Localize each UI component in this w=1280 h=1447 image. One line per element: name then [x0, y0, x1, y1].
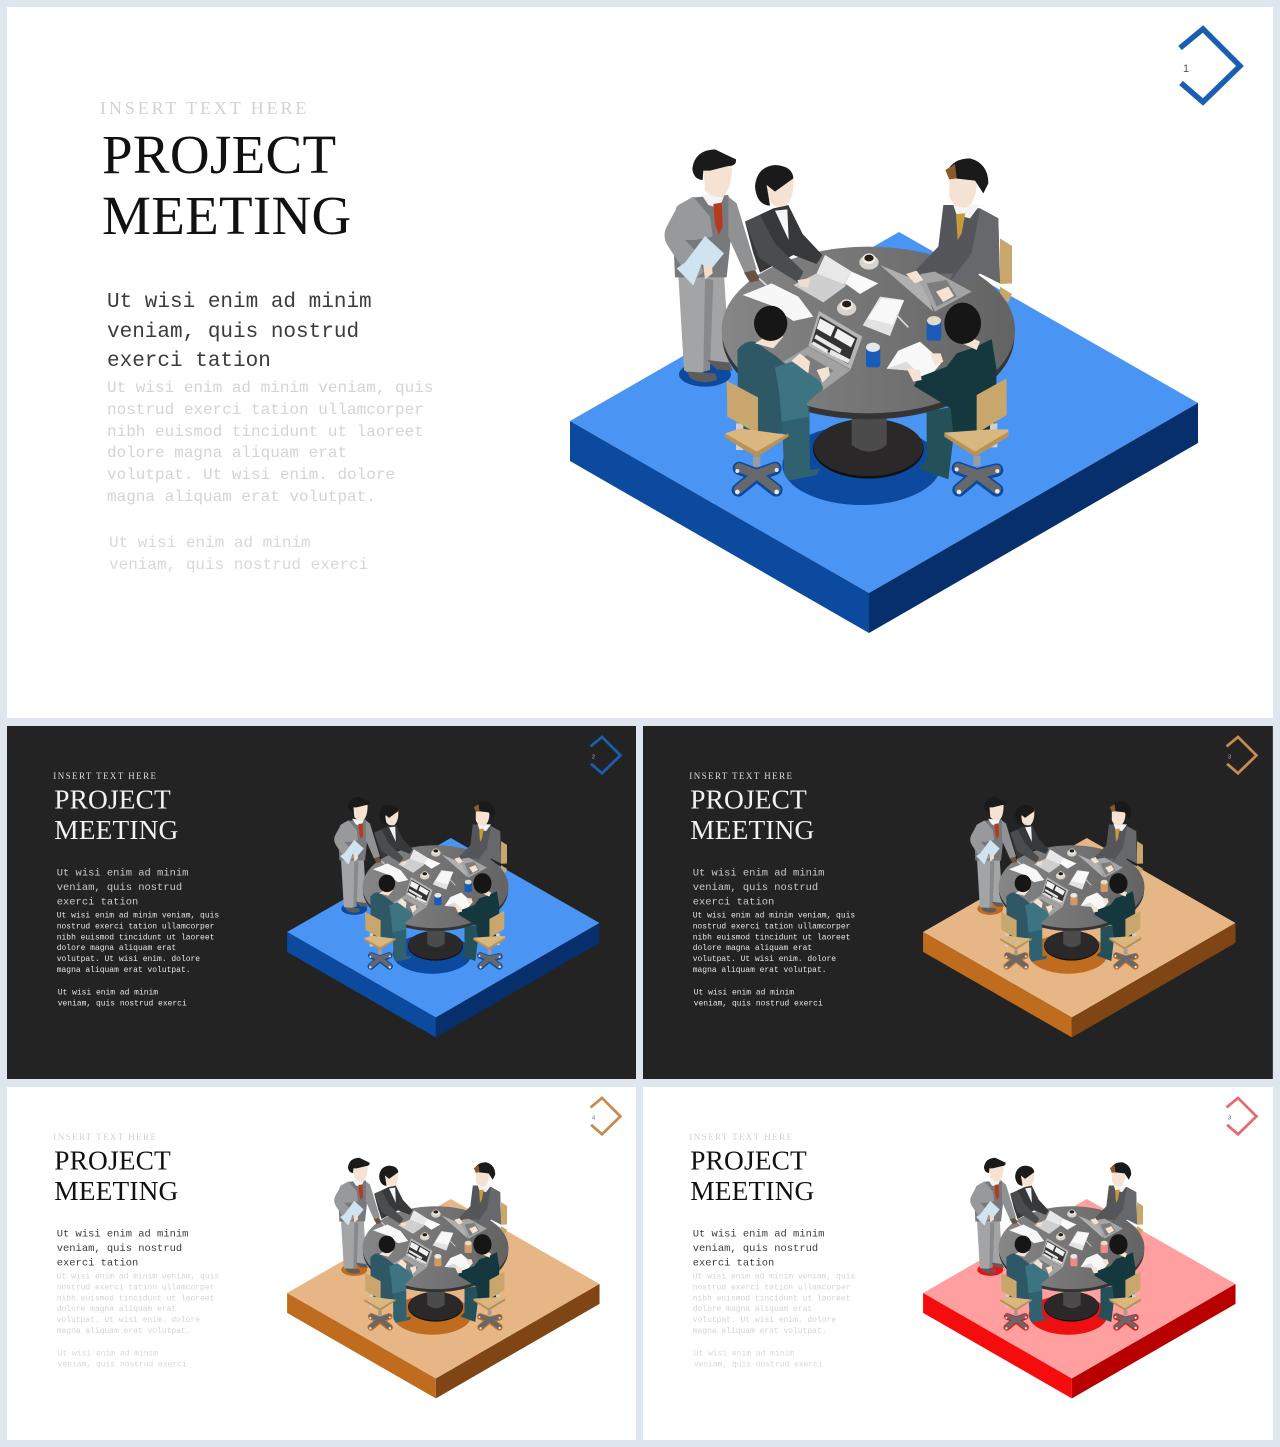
title: [690, 784, 814, 845]
standing man: [665, 149, 757, 382]
title: [690, 1145, 814, 1206]
open laptop, centre: [783, 311, 862, 390]
panel: slide 3, dark tan: [643, 726, 1273, 1079]
short paragraph: Ut wisi enim ad minim veniam, quis nostrud exerci: [694, 988, 823, 1008]
body paragraph: Ut wisi enim ad minim veniam, quis nostrud exerci tation ullamcorper nibh euismod tincidunt ut laoreet dolore magna aliquam erat volutpat. Ut wisi enim. dolore magna aliquam erat volutpat.: [693, 911, 855, 974]
panel: slide 1, light blue: [7, 7, 1273, 718]
subheading text: Ut wisi enim ad minim veniam, quis nostrud exerci tation: [57, 867, 188, 908]
eyebrow text: INSERT TEXT HERE: [689, 771, 793, 781]
icon: page number chevron: [1178, 25, 1244, 106]
eyebrow text: INSERT TEXT HERE: [689, 1132, 793, 1142]
title: MEETING: [102, 185, 352, 246]
icon: page number chevron: [1226, 735, 1258, 776]
icon: page number chevron: [590, 735, 622, 776]
papers and laptop, left of table: [743, 255, 878, 321]
icon: page number chevron: [590, 1096, 622, 1136]
standing man's hand on table: [744, 270, 761, 283]
woman in dark suit: [745, 165, 822, 283]
panel: slide 5, light red: [643, 1087, 1273, 1440]
eyebrow text: INSERT TEXT HERE: [53, 771, 157, 781]
body paragraph: Ut wisi enim ad minim veniam, quis nostrud exerci tation ullamcorper nibh euismod tincidunt ut laoreet dolore magna aliquam erat volutpat. Ut wisi enim. dolore magna aliquam erat volutpat.: [693, 1272, 855, 1335]
body paragraph: Ut wisi enim ad minim veniam, quis nostrud exerci tation ullamcorper nibh euismod tincidunt ut laoreet dolore magna aliquam erat volutpat. Ut wisi enim. dolore magna aliquam erat volutpat.: [107, 379, 433, 506]
body paragraph: Ut wisi enim ad minim veniam, quis nostrud exerci tation ullamcorper nibh euismod tincidunt ut laoreet dolore magna aliquam erat volutpat. Ut wisi enim. dolore magna aliquam erat volutpat.: [57, 911, 219, 974]
subheading text: Ut wisi enim ad minim veniam, quis nostrud exerci tation: [57, 1228, 188, 1269]
round table top: [722, 247, 1015, 419]
short paragraph: Ut wisi enim ad minim veniam, quis nostrud exerci: [58, 988, 187, 1008]
page number: 4: [592, 1115, 595, 1121]
panel: slide 2, dark blue: [7, 726, 636, 1079]
panel: slide 4, light tan: [7, 1087, 636, 1440]
illustration: meeting, blue platform: [287, 797, 600, 1038]
eyebrow text: INSERT TEXT HERE: [100, 98, 309, 118]
title: MEETING: [690, 815, 814, 845]
illustration: meeting, red platform: [923, 1158, 1236, 1398]
illustration: meeting, tan platform: [923, 797, 1236, 1038]
title: [102, 124, 352, 246]
illustration: isometric meeting at round table: [570, 149, 1198, 633]
page number: 1: [1183, 63, 1189, 75]
short paragraph: Ut wisi enim ad minim veniam, quis nostrud exerci: [109, 534, 368, 574]
right seated man with chair: [907, 303, 1008, 494]
notebook and pen: [863, 297, 908, 336]
title: MEETING: [54, 815, 178, 845]
drink cans: [866, 316, 941, 367]
short paragraph: Ut wisi enim ad minim veniam, quis nostrud exerci: [694, 1349, 823, 1369]
table pedestal: [813, 417, 924, 479]
title: PROJECT: [690, 784, 807, 815]
title: PROJECT: [102, 124, 336, 185]
title: [54, 1145, 178, 1206]
illustration: meeting, tan platform: [287, 1158, 600, 1398]
floor shadows: [679, 362, 997, 505]
title: PROJECT: [54, 784, 171, 815]
subheading text: Ut wisi enim ad minim veniam, quis nostrud exerci tation: [107, 291, 372, 373]
title: MEETING: [54, 1176, 178, 1206]
coffee cups: [837, 253, 879, 316]
title: PROJECT: [54, 1145, 171, 1176]
icon: page number chevron: [1226, 1096, 1258, 1136]
title: MEETING: [690, 1176, 814, 1206]
left seated man with chair: [725, 306, 830, 494]
laptop, far right: [880, 265, 972, 312]
page number: 3: [1228, 1115, 1231, 1121]
platform: [570, 232, 1198, 633]
subheading text: Ut wisi enim ad minim veniam, quis nostrud exerci tation: [693, 1228, 824, 1269]
page number: 3: [1228, 754, 1231, 760]
subheading text: Ut wisi enim ad minim veniam, quis nostrud exerci tation: [693, 867, 824, 908]
page number: 2: [592, 754, 595, 760]
man at far right: [915, 158, 1000, 292]
eyebrow text: INSERT TEXT HERE: [53, 1132, 157, 1142]
title: PROJECT: [690, 1145, 807, 1176]
chair back, far right: [1000, 238, 1012, 303]
body paragraph: Ut wisi enim ad minim veniam, quis nostrud exerci tation ullamcorper nibh euismod tincidunt ut laoreet dolore magna aliquam erat volutpat. Ut wisi enim. dolore magna aliquam erat volutpat.: [57, 1272, 219, 1335]
short paragraph: Ut wisi enim ad minim veniam, quis nostrud exerci: [58, 1349, 187, 1369]
title: [54, 784, 178, 845]
front right papers: [887, 342, 942, 381]
